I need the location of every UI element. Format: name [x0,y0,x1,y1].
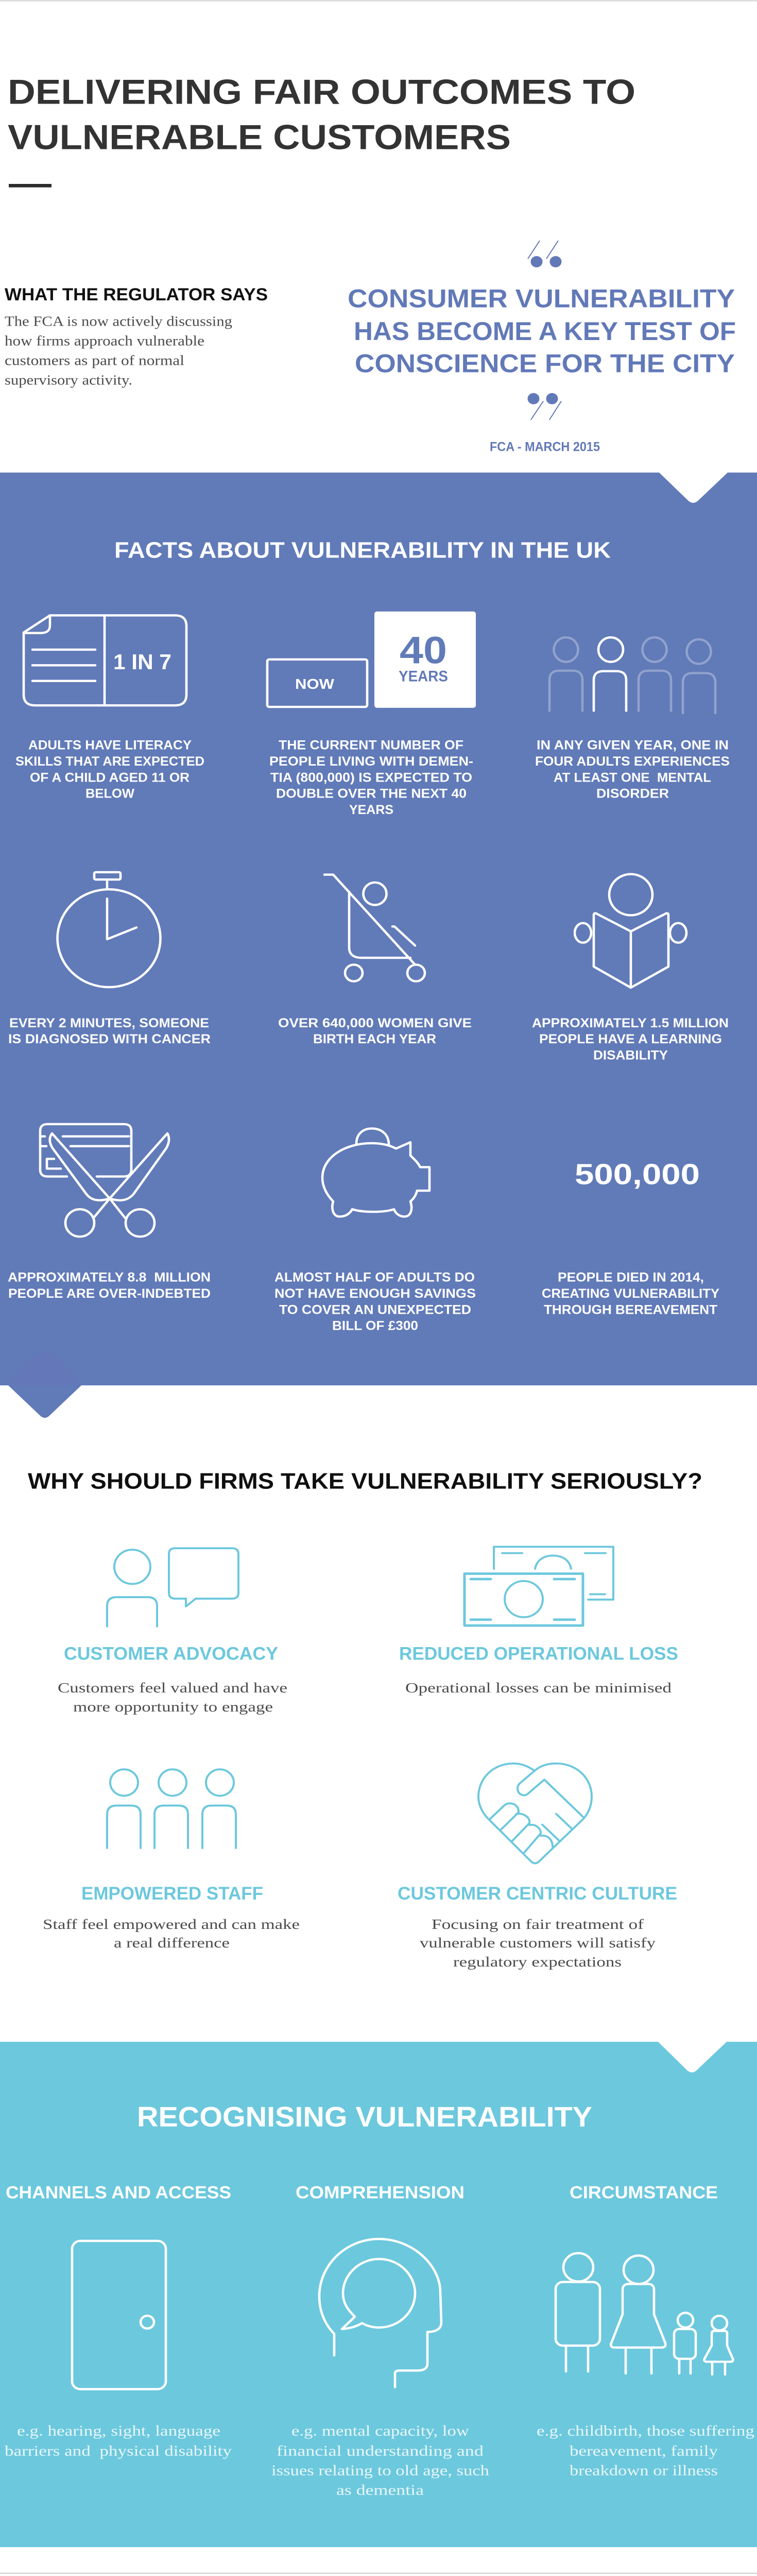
caption: mental disorder [535,738,730,801]
icon: now vs 40 years: NOW [295,676,334,692]
caption: over-indebted: PEOPLE ARE OVER-INDEBTED [8,1287,211,1301]
caption: literacy [15,738,204,801]
heading: customer centric culture: CUSTOMER CENTRIC CULTURE [398,1883,677,1904]
text block: circumstance: e.g. childbirth, those suffering [537,2423,754,2439]
heading: circumstance: CIRCUMSTANCE [570,2183,718,2202]
caption: dementia: THE CURRENT NUMBER OF [279,738,463,752]
caption: savings: NOT HAVE ENOUGH SAVINGS [274,1287,476,1301]
text block: regulator intro: customers as part of normal [5,353,184,368]
icon: document 1 in 7 [24,615,186,705]
text block: channels and access: barriers and physical disability [5,2443,232,2459]
caption: dementia: PEOPLE LIVING WITH DEMEN- [269,755,473,769]
text block: empowered staff: Staff feel empowered and can make [43,1917,300,1933]
caption: learning disability [532,1016,729,1062]
caption: mental disorder: IN ANY GIVEN YEAR, ONE IN [537,738,729,752]
text block: comprehension: e.g. mental capacity, low [291,2423,469,2439]
text block: customer advocacy: more opportunity to engage [73,1700,273,1715]
quote attribution: FCA - MARCH 2015 [490,440,600,454]
caption: savings: BILL OF £300 [332,1319,418,1333]
caption: literacy: ADULTS HAVE LITERACY [28,738,192,752]
icon: customer and speech bubble [107,1548,238,1626]
caption: dementia: TIA (800,000) IS EXPECTED TO [270,771,472,785]
text block: empowered staff [43,1917,300,1951]
heading: reduced operational loss: REDUCED OPERATIONAL LOSS [399,1643,678,1664]
caption: bereavement: CREATING VULNERABILITY [542,1287,719,1301]
caption: mental disorder: AT LEAST ONE MENTAL [554,771,711,785]
caption: literacy: BELOW [85,787,134,801]
icon: scissors cutting card [40,1124,169,1236]
icon: now vs 40 years: 40 [400,629,447,672]
quote: HAS BECOME A KEY TEST OF [354,316,736,346]
heading: recognising vulnerability: RECOGNISING VULNERABILITY [137,2101,592,2132]
caption: literacy: SKILLS THAT ARE EXPECTED [15,755,204,769]
title: VULNERABLE CUSTOMERS [8,117,511,157]
icon: heart handshake [478,1764,592,1863]
caption: cancer [8,1016,211,1046]
text block: channels and access [5,2423,232,2459]
icon: closing quote mark [527,393,561,420]
caption: bereavement: PEOPLE DIED IN 2014, [558,1270,704,1284]
panel: facts about vulnerability [0,472,757,1418]
icon: three staff [107,1769,236,1848]
text block: customer centric culture [420,1917,656,1970]
text block: regulator intro: supervisory activity. [5,372,132,388]
title rule [9,184,51,188]
caption: bereavement: THROUGH BEREAVEMENT [544,1303,718,1317]
caption: birth [278,1016,472,1046]
text block: comprehension: as dementia [336,2482,424,2498]
heading: what the regulator says: WHAT THE REGULATOR SAYS [5,285,268,304]
text block: circumstance [537,2423,754,2479]
icon: opening quote mark [528,241,561,267]
text block: customer centric culture: vulnerable customers will satisfy [420,1936,656,1951]
quote: CONSCIENCE FOR THE CITY [355,349,735,378]
caption: savings: TO COVER AN UNEXPECTED [279,1303,471,1317]
text block: regulator intro: The FCA is now actively discussing [5,314,232,329]
caption: savings [274,1270,476,1333]
caption: learning disability: DISABILITY [593,1048,668,1062]
text block: customer centric culture: regulatory expectations [453,1955,622,1970]
caption: learning disability: APPROXIMATELY 1.5 MILLION [532,1016,729,1030]
text block: customer advocacy: Customers feel valued and have [58,1681,287,1696]
heading: customer advocacy: CUSTOMER ADVOCACY [64,1643,278,1664]
caption: birth: BIRTH EACH YEAR [313,1032,436,1046]
title: DELIVERING FAIR OUTCOMES TO [8,72,635,111]
caption: cancer: IS DIAGNOSED WITH CANCER [8,1032,211,1046]
caption: mental disorder: DISORDER [596,787,669,801]
caption: cancer: EVERY 2 MINUTES, SOMEONE [9,1016,209,1030]
text block: channels and access: e.g. hearing, sight, language [17,2423,220,2439]
caption: dementia: YEARS [349,803,393,817]
caption: bereavement [542,1270,719,1317]
quote [348,284,736,378]
text block: regulator intro [5,314,232,388]
icon: now vs 40 years: YEARS [399,668,448,685]
text block: comprehension [271,2423,489,2498]
icon: bank notes [464,1547,613,1625]
number: 500,000: 500,000 [575,1158,700,1191]
quote: CONSUMER VULNERABILITY [348,284,735,313]
heading: empowered staff: EMPOWERED STAFF [81,1883,263,1904]
text block: comprehension: issues relating to old age, such [271,2463,489,2479]
heading: why should firms: WHY SHOULD FIRMS TAKE VULNERABILITY SERIOUSLY? [28,1468,702,1494]
icon: door [72,2241,166,2389]
caption: over-indebted [8,1270,211,1301]
icon: now vs 40 years [267,612,476,708]
text block: empowered staff: a real difference [114,1936,230,1951]
icon: person reading [575,874,686,988]
icon: family [556,2253,733,2375]
text block: customer advocacy [58,1681,287,1715]
icon: stopwatch [58,872,161,987]
heading: comprehension: COMPREHENSION [296,2183,464,2202]
panel: recognising vulnerability [0,2042,757,2547]
caption: literacy: OF A CHILD AGED 11 OR [30,771,190,785]
icon: head with speech bubble [319,2239,441,2387]
icon: piggy bank [322,1128,429,1216]
icon: one in four adults [549,637,715,713]
heading: facts: FACTS ABOUT VULNERABILITY IN THE UK [114,537,611,563]
text block: regulator intro: how firms approach vulnerable [5,333,204,349]
caption: savings: ALMOST HALF OF ADULTS DO [274,1270,475,1284]
text block: circumstance: bereavement, family [570,2443,718,2459]
text block: customer centric culture: Focusing on fair treatment of [432,1917,644,1933]
caption: dementia [269,738,473,817]
title [8,72,635,157]
caption: birth: OVER 640,000 WOMEN GIVE [278,1016,472,1030]
caption: dementia: DOUBLE OVER THE NEXT 40 [276,787,467,801]
text block: operational loss: Operational losses can be minimised [405,1681,672,1696]
heading: channels and access: CHANNELS AND ACCESS [6,2183,231,2202]
text block: comprehension: financial understanding and [277,2443,484,2459]
icon: pushchair [324,875,425,981]
text block: circumstance: breakdown or illness [570,2463,718,2479]
caption: over-indebted: APPROXIMATELY 8.8 MILLION [8,1270,211,1284]
caption: learning disability: PEOPLE HAVE A LEARNING [539,1032,722,1046]
icon: document 1 in 7: 1 IN 7 [113,650,171,674]
caption: mental disorder: FOUR ADULTS EXPERIENCES [535,755,730,769]
